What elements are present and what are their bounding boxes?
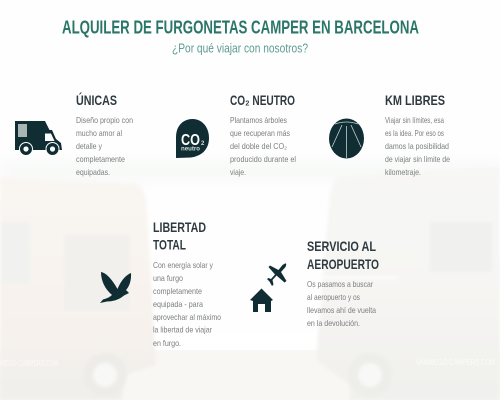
text: Únicas description: Diseño propio con (76, 115, 133, 125)
right van (316, 167, 500, 400)
icon: CO2 neutro badge: CO (181, 132, 200, 149)
icon: camper van (15, 121, 62, 156)
icon: bird (100, 272, 131, 303)
feature: Únicas (15, 91, 133, 177)
text: Únicas description: equipadas. (76, 167, 110, 177)
text: Libertad total description: la libertad de viajar (153, 324, 212, 334)
icon: house (250, 288, 273, 312)
icon: airplane (267, 263, 286, 286)
icon: CO2 neutro badge (176, 119, 209, 158)
heading: CO2 neutro: CO₂ NEUTRO (230, 92, 295, 108)
feature: Servicio al aeropuerto (250, 238, 379, 328)
text: Únicas description: completamente (76, 154, 125, 164)
text: Servicio al aeropuerto description (307, 279, 376, 328)
text: Únicas description: mucho amor al (76, 128, 122, 138)
text: Km libres description: es la idea. Por eso os (385, 128, 444, 138)
text: Servicio al aeropuerto description: en la devolución. (307, 318, 360, 328)
icon: CO2 neutro badge: neutro (181, 146, 200, 152)
heading: Únicas: ÚNICAS (76, 91, 117, 108)
heading: Libertad total: TOTAL (153, 236, 186, 252)
text: Km libres description (385, 115, 450, 177)
heading: Servicio al aeropuerto: AEROPUERTO (307, 256, 379, 272)
icon: CO2 neutro badge: 2 (201, 141, 205, 147)
text: Libertad total description: en furgo. (153, 338, 181, 348)
text: Libertad total description: equipada - para (153, 299, 203, 309)
feature: Libertad total (100, 219, 221, 348)
text: Únicas description (76, 115, 133, 177)
text: Km libres description: kilometraje. (385, 167, 421, 177)
text: Km libres description: damos la posibilidad (385, 141, 449, 151)
text: CO2 neutro description: viaje. (230, 167, 246, 177)
text: CO2 neutro description: producido durante el (230, 154, 296, 164)
text: Únicas description: detalle y (76, 141, 103, 151)
background photo: vans on a beach: WEGO-CAMPERS.COM (0, 359, 58, 368)
text: CO2 neutro description: Plantamos árboles (230, 115, 287, 125)
icon: road (329, 118, 364, 158)
text: Servicio al aeropuerto description: al aeropuerto y os (307, 292, 360, 302)
text: Libertad total description: aprovechar al máximo (153, 312, 221, 322)
text: Libertad total description: completamente (153, 286, 202, 296)
text: Km libres description: de viajar sin límite de (385, 154, 450, 164)
text: Servicio al aeropuerto description: Os pasamos a buscar (307, 279, 373, 289)
text: Libertad total description: una furgo (153, 273, 183, 283)
heading: Km libres: KM LIBRES (385, 92, 445, 108)
heading: Servicio al aeropuerto: SERVICIO AL (307, 238, 376, 254)
text: Libertad total description (153, 260, 221, 348)
feature: CO2 neutro (176, 92, 296, 177)
feature: Km libres (329, 92, 450, 177)
text: Km libres description: Viajar sin límites, esa (385, 115, 444, 125)
text: Servicio al aeropuerto description: llevamos ahí de vuelta (307, 305, 376, 315)
text: CO2 neutro description: que recuperan más (230, 128, 290, 138)
text: CO2 neutro description: del doble del CO₂ (230, 141, 287, 151)
text: Libertad total description: Con energía solar y (153, 260, 214, 270)
subtitle: ¿Por qué viajar con nosotros? (172, 40, 308, 56)
left van (0, 177, 156, 400)
heading: Servicio al aeropuerto (307, 238, 379, 272)
text: CO2 neutro description (230, 115, 296, 177)
heading: Libertad total (153, 219, 206, 252)
heading: Libertad total: LIBERTAD (153, 219, 206, 235)
